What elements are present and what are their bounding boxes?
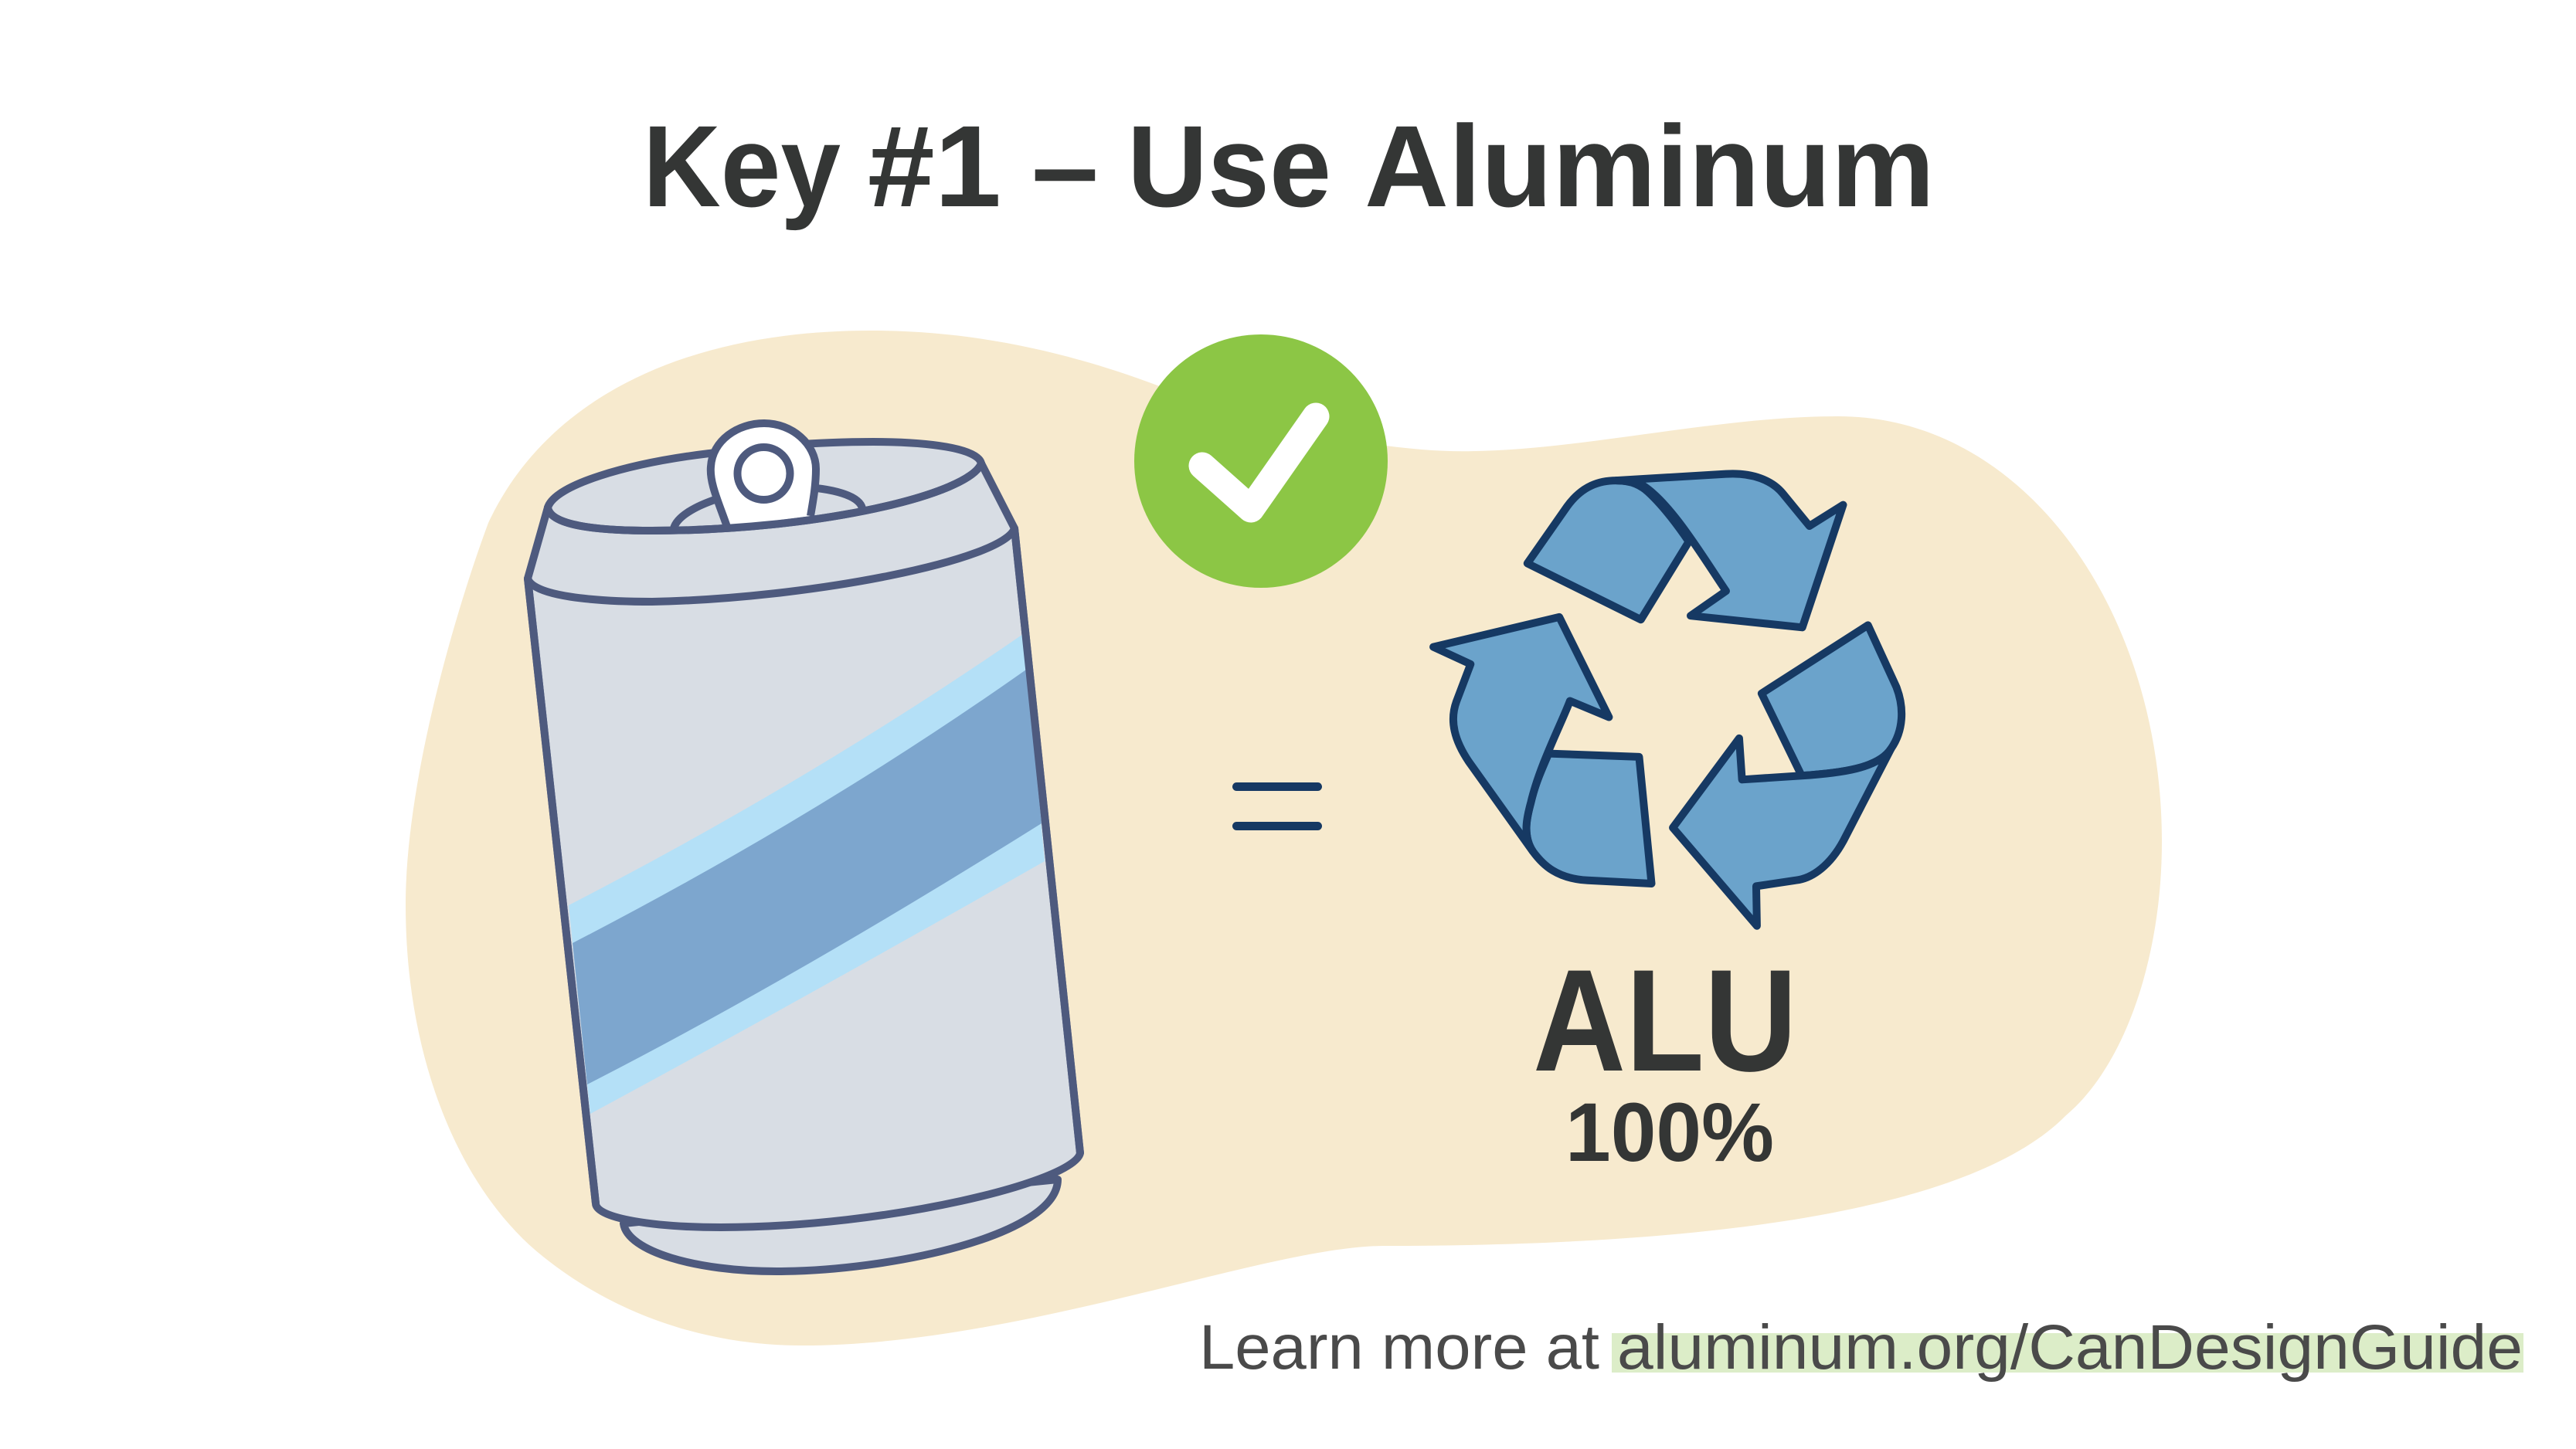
footer link highlight bbox=[1612, 1333, 2523, 1373]
right arrow bbox=[1762, 625, 1901, 775]
icon: aluminum can bbox=[528, 423, 1080, 1271]
title: – bbox=[1031, 101, 1099, 231]
background blob bbox=[406, 331, 2162, 1346]
title: Use bbox=[1127, 101, 1331, 231]
can stripe: light band bbox=[569, 634, 1045, 1114]
rim front edge bbox=[548, 463, 981, 531]
equals sign bbox=[1232, 782, 1322, 830]
title: Aluminum bbox=[1364, 101, 1935, 231]
can stripe: dark band bbox=[573, 670, 1042, 1084]
top arrow bbox=[1528, 480, 1689, 619]
footer text: Learn more at bbox=[1199, 1312, 1599, 1383]
title: Key bbox=[643, 101, 841, 231]
title: #1 bbox=[868, 101, 1001, 231]
pull tab hole bbox=[737, 447, 790, 500]
icon: recycling symbol bbox=[1433, 473, 1901, 926]
icon: green check badge bbox=[1134, 334, 1388, 588]
can opening bbox=[674, 487, 862, 528]
can foot bbox=[624, 1179, 1058, 1271]
can shoulder line bbox=[528, 528, 1014, 602]
label: 100%: 100% bbox=[1565, 1085, 1774, 1179]
can top rim bbox=[548, 442, 981, 531]
left arrow bbox=[1527, 754, 1652, 884]
footer text: aluminum.org/CanDesignGuide bbox=[1617, 1312, 2523, 1383]
can outline over stripes bbox=[528, 528, 1080, 1203]
label: ALU: ALU bbox=[1533, 939, 1797, 1101]
can pull tab bbox=[711, 423, 816, 527]
can body bbox=[528, 463, 1080, 1227]
